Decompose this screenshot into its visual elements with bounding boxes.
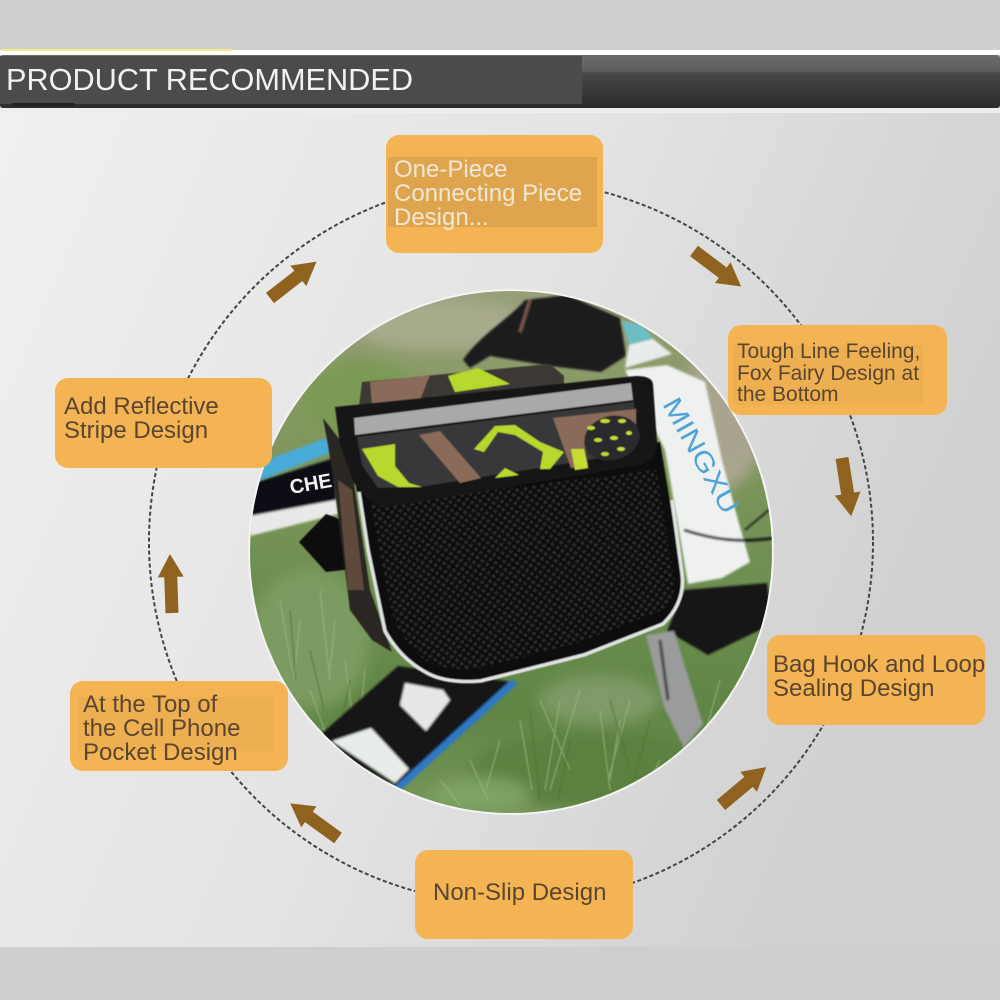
callout: Cell Phone Pocket: [70, 681, 288, 771]
camo pattern: [362, 444, 422, 487]
callout: Cell Phone Pocket: the Cell Phone: [83, 715, 240, 742]
callout: Add Reflective: Stripe Design: [64, 417, 208, 444]
bag mesh body: [355, 442, 682, 682]
header band: [0, 49, 1000, 113]
upper frame tube: [250, 438, 332, 484]
callout: Bag Hook: [767, 635, 985, 725]
bag left side: [323, 418, 392, 652]
fork: [646, 631, 703, 748]
title: PRODUCT RECOMMENDED: [6, 62, 413, 97]
callout: One-Piece: [386, 135, 603, 253]
lower frame tube: [320, 666, 512, 786]
arrow: right: [829, 456, 864, 518]
white head tube: [625, 365, 750, 584]
bag back pouch: [358, 364, 564, 406]
arrow: left: [157, 554, 185, 613]
callout: Cell Phone Pocket: At the Top of: [83, 691, 218, 718]
arrow: bottom right: [713, 757, 775, 815]
handlebar: [463, 295, 626, 372]
CHE frame lettering: CHE: [288, 470, 333, 499]
callout: One-Piece: One-Piece: [394, 156, 507, 183]
callout: Tough Line: the Bottom: [737, 383, 839, 406]
black bracket: [667, 583, 772, 655]
mingxu frame lettering: MINGXU: [657, 392, 745, 519]
callout: One-Piece: Connecting Piece: [394, 180, 582, 207]
product photo: bag on bicycle: [240, 280, 780, 820]
callout: Non-Slip: Non-Slip Design: [433, 879, 606, 906]
callout: Tough Line: [728, 325, 947, 415]
callout: Bag Hook: Sealing Design: [773, 675, 934, 702]
arrow: top left: [262, 251, 324, 308]
callout: Tough Line: Tough Line Feeling,: [737, 340, 920, 363]
callout: Add Reflective: Add Reflective: [64, 393, 219, 420]
callout: Bag Hook: Bag Hook and Loop: [773, 651, 985, 678]
bag flap: [335, 376, 657, 507]
bike parts: [250, 295, 775, 791]
callout: Tough Line: Fox Fairy Design at: [737, 362, 919, 385]
callout: Add Reflective: [55, 378, 272, 468]
callout: Non-Slip: [415, 850, 633, 939]
side strap: [299, 514, 352, 572]
dashed ring: [149, 180, 873, 904]
arrow: top right: [686, 241, 749, 297]
callout: Cell Phone Pocket: Pocket Design: [83, 739, 238, 766]
callout: One-Piece: Design...: [394, 204, 489, 231]
arrow: bottom left: [283, 793, 346, 849]
